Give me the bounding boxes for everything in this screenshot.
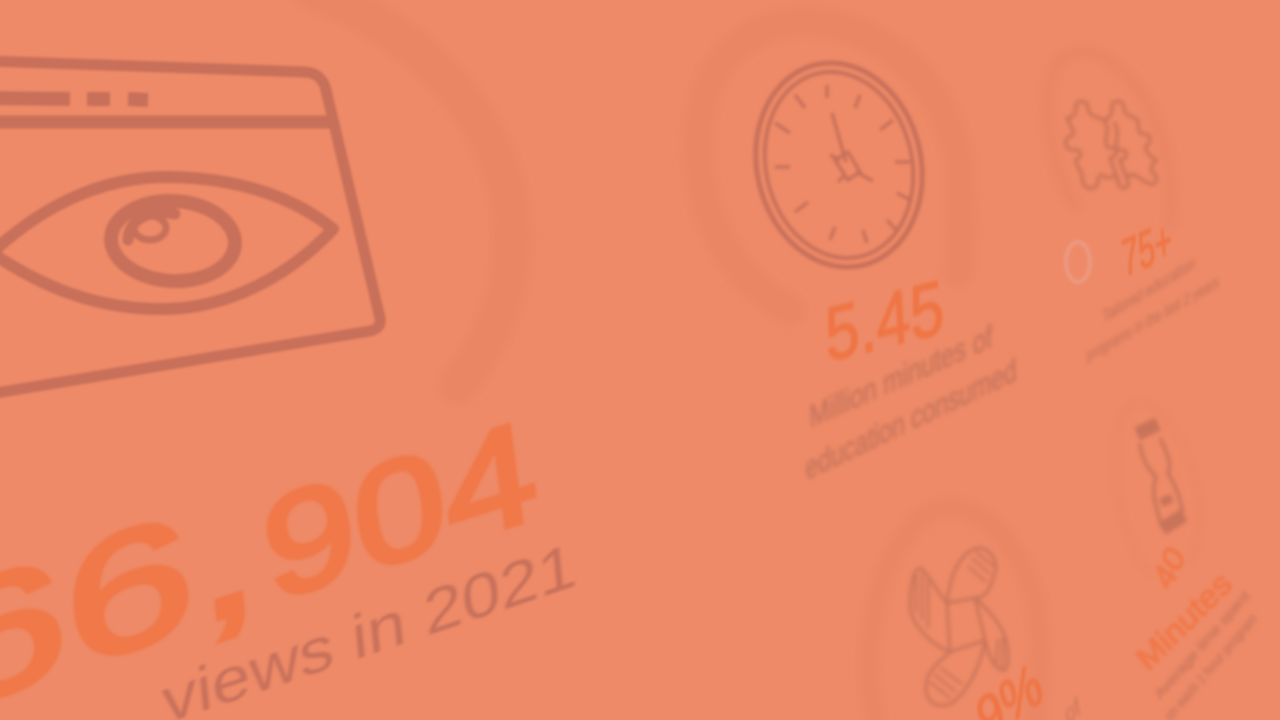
big number: page views: 904 xyxy=(254,389,545,632)
caption: million minutes: education consumed xyxy=(805,352,1017,488)
eye highlight xyxy=(128,212,175,240)
clock rim xyxy=(736,46,942,284)
hands outline xyxy=(947,598,985,652)
icon: joined hands xyxy=(910,548,1008,705)
hourglass sand xyxy=(1161,498,1172,503)
window header dots xyxy=(0,98,148,100)
hourglass caps xyxy=(1137,424,1184,529)
eye iris xyxy=(109,198,237,284)
icon: hourglass xyxy=(1137,424,1184,529)
stat: 5.45: 5.45 xyxy=(823,264,946,378)
hand fingers xyxy=(916,552,1003,698)
icon: browser window with eye xyxy=(0,61,380,394)
hourglass body xyxy=(1140,438,1183,527)
caption: million minutes: Million minutes of xyxy=(809,319,994,436)
clock ticks xyxy=(775,85,910,243)
big number: page views xyxy=(0,389,545,720)
stat: 40 minutes: 40 xyxy=(1148,540,1192,596)
eye outline xyxy=(0,177,333,309)
stat: 75+: 75+ xyxy=(1119,210,1175,289)
clock hands xyxy=(832,113,873,181)
icon: clock xyxy=(736,46,942,284)
decorative progress arcs xyxy=(310,0,1200,720)
stat: 40 minutes: Minutes xyxy=(1129,565,1238,677)
clock hub xyxy=(830,152,860,182)
icon: small circle xyxy=(1066,242,1090,282)
caption: tailored programs: programs in the last 2 years xyxy=(1086,273,1219,367)
icon: puzzle pieces xyxy=(1066,101,1156,189)
caption: tailored programs: Tailored education xyxy=(1102,253,1196,327)
caption: average time: Average time spent xyxy=(1152,587,1253,703)
window frame xyxy=(0,61,380,394)
window header rule xyxy=(0,116,330,128)
